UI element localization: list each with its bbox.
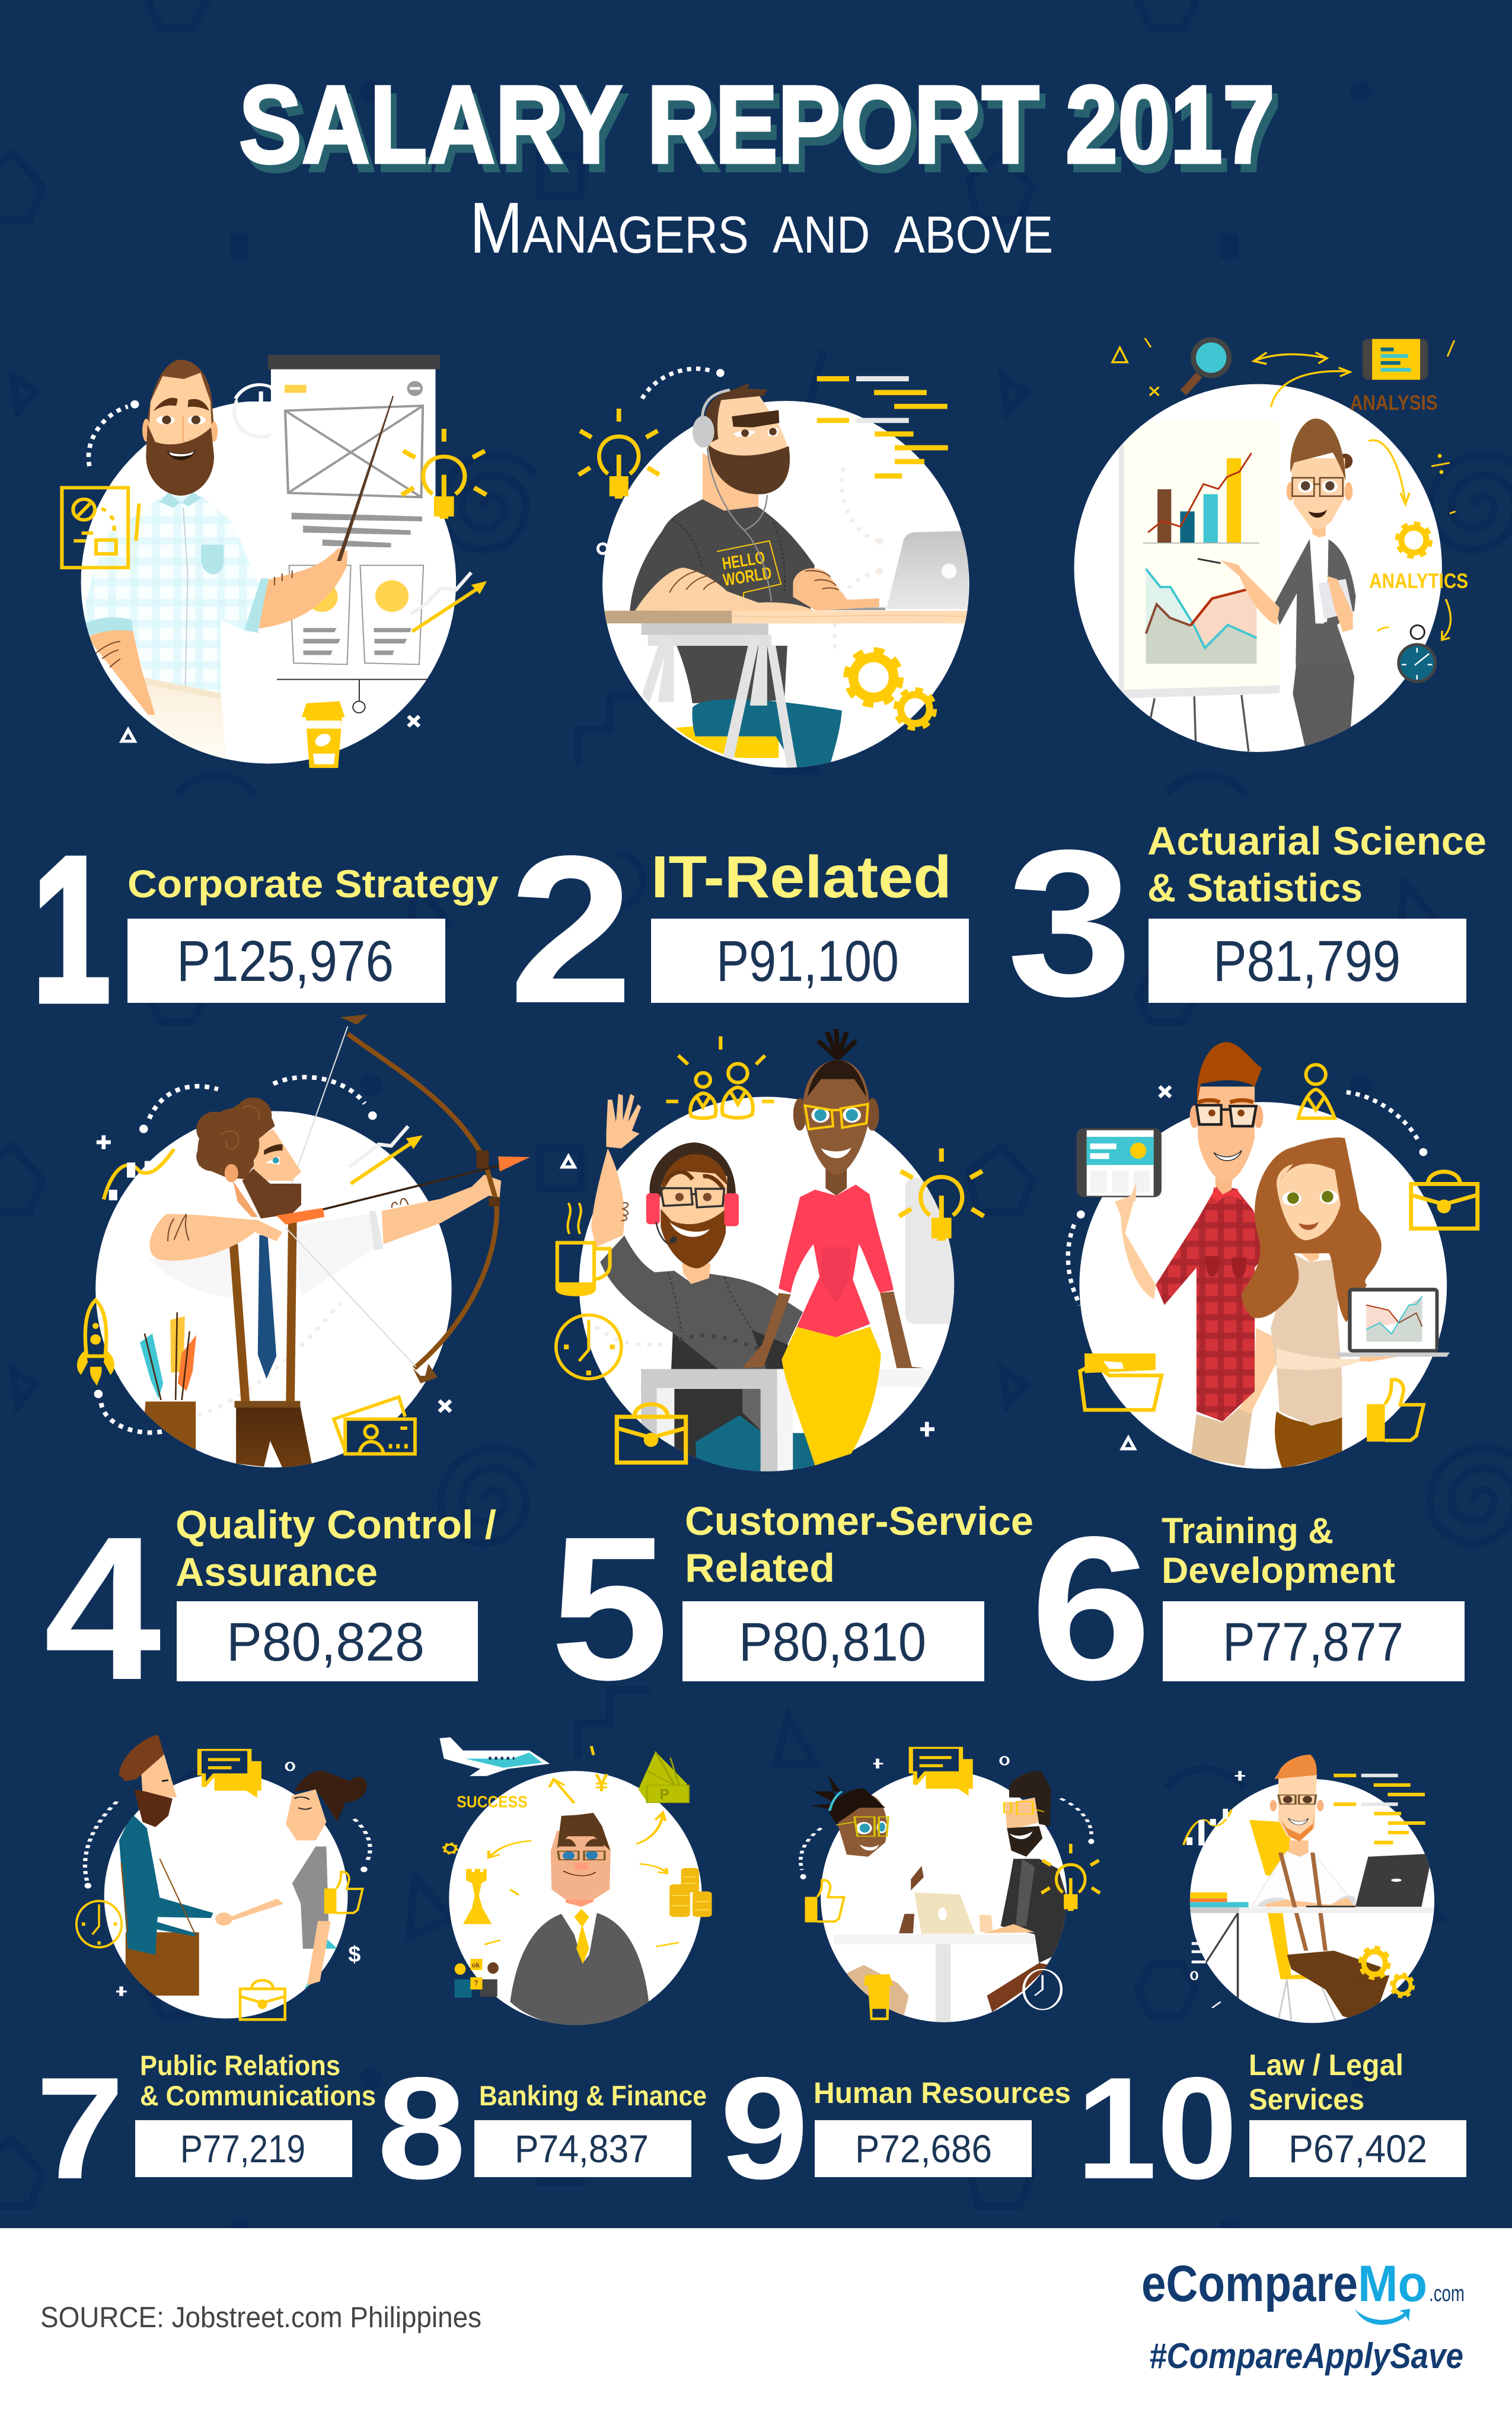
icon: code lines	[1334, 1774, 1425, 1844]
man in plaid	[1115, 1042, 1269, 1422]
title: SALARY REPORT 2017	[239, 63, 1275, 186]
illustration 5: customer service team	[556, 1029, 984, 1474]
tshirt logo: HELLO	[721, 548, 767, 573]
salary box: P74,837	[515, 2127, 649, 2171]
icon: dotted arc	[88, 400, 139, 466]
salary box: P72,686	[855, 2127, 992, 2171]
programmer head	[693, 383, 790, 601]
numeral 7: 7	[36, 2047, 125, 2209]
icon: bulb	[899, 1148, 984, 1241]
label: actuarial science and statistics	[1147, 819, 1487, 910]
logo: Mo	[1358, 2255, 1427, 2312]
icon: rocket	[77, 1300, 114, 1386]
man in grey shirt	[591, 1094, 803, 1369]
dollar sign: $	[348, 1942, 361, 1967]
label: quality control: Assurance	[176, 1550, 378, 1595]
salary box	[1163, 1601, 1465, 1681]
rank 3	[1007, 806, 1487, 1040]
sleeve shadow	[149, 1214, 375, 1297]
icon: briefcase	[1411, 1172, 1478, 1229]
salary box	[682, 1601, 984, 1681]
rank 5	[550, 1495, 1033, 1723]
icon: mug	[557, 1203, 610, 1295]
arrows	[484, 1746, 679, 1946]
logo: .com	[1429, 2281, 1465, 2306]
illustration 2: IT worker	[579, 369, 969, 769]
label: analysis: ANALYSIS	[1350, 391, 1438, 415]
icon: money fan: P	[660, 1787, 669, 1803]
handshake	[215, 1913, 232, 1926]
salary box: P67,402	[1288, 2127, 1427, 2171]
numeral 5: 5	[550, 1495, 669, 1723]
salary box: P77,877	[1223, 1612, 1403, 1672]
meeting scene	[834, 1859, 1069, 2024]
icon: ID card	[334, 1397, 415, 1454]
white circle	[821, 1771, 1067, 2022]
salary box: P81,799	[1213, 929, 1401, 993]
rank 1	[32, 814, 499, 1046]
title: SALARY REPORT 2017	[245, 72, 1281, 195]
icon: coffee cup	[302, 701, 344, 768]
icon: tablet	[1363, 339, 1428, 380]
icon: curve chart	[104, 1149, 174, 1200]
ghost clock	[234, 385, 288, 437]
icon: gears	[1360, 1948, 1414, 1997]
icon: code lines	[817, 376, 948, 479]
illustration 10: law and legal services	[1184, 1755, 1434, 2026]
illustration 9: human resources	[800, 1748, 1100, 2024]
label: public relations: Public Relations	[140, 2050, 340, 2081]
icon: coin stacks	[669, 1868, 712, 1917]
presenter head	[142, 360, 218, 496]
arrow	[276, 1156, 530, 1225]
illustration 1: corporate strategy presenter	[62, 355, 487, 768]
faint dots	[835, 467, 883, 652]
woman lower	[1275, 1411, 1342, 1469]
icon: marks	[122, 716, 419, 741]
salary box: P77,219	[180, 2127, 305, 2171]
label: public relations: & Communications	[140, 2080, 376, 2111]
icon: stopwatch	[1399, 625, 1436, 681]
salary box	[651, 919, 969, 1003]
numeral 4: 4	[44, 1495, 162, 1723]
salary box	[1149, 919, 1466, 1003]
illustration 8: banking and finance	[439, 1737, 712, 2026]
icon: rising arrow	[411, 572, 487, 632]
dots of divide sign	[1438, 454, 1443, 474]
desk	[605, 611, 968, 646]
numeral 9: 9	[720, 2047, 809, 2209]
label: success: SUCCESS	[457, 1792, 528, 1811]
woman in red top	[742, 1029, 924, 1465]
salary box	[474, 2120, 691, 2177]
label: customer service	[685, 1499, 1033, 1591]
white circle	[104, 1773, 347, 2019]
laptop	[815, 531, 968, 610]
lawyer head	[1270, 1755, 1323, 1857]
icon: light bulb	[401, 429, 486, 519]
icon: person	[1299, 1065, 1335, 1118]
tshirt logo: WORLD	[722, 564, 773, 590]
numeral 3: 3	[1007, 806, 1133, 1040]
label: actuarial science and statistics: & Statistics	[1147, 866, 1363, 910]
white circle	[81, 400, 456, 764]
footer	[0, 2228, 1512, 2409]
label: training and development: Development	[1162, 1550, 1395, 1591]
marks	[562, 1156, 934, 1436]
icon: magnifier	[1184, 340, 1229, 393]
icons: marks	[1112, 338, 1456, 631]
icon: money fan	[639, 1751, 689, 1803]
rank 4	[44, 1495, 496, 1723]
flip chart	[1119, 422, 1356, 751]
desk legs	[642, 637, 798, 769]
faint path	[197, 1303, 340, 1415]
dotted arcs	[1068, 1092, 1427, 1305]
salary box: P91,100	[716, 929, 899, 993]
logo: eCompare	[1141, 2255, 1358, 2312]
icon: meeting people	[455, 1959, 499, 1997]
illustration 3: actuarial analyst	[1074, 338, 1468, 752]
numeral 1: 1	[32, 814, 111, 1046]
programmer scene	[605, 499, 968, 769]
handshake people	[119, 1814, 336, 1996]
icon: gears	[847, 651, 934, 728]
salary box: P125,976	[177, 929, 394, 993]
rank 10	[1076, 2047, 1466, 2209]
icon: yellow card	[62, 487, 139, 568]
archer head	[196, 1098, 301, 1219]
presenter	[79, 492, 347, 764]
hashtag: #CompareApplySave	[1149, 2336, 1463, 2376]
icon: chess rook	[463, 1869, 492, 1924]
icon: light bulb	[579, 409, 659, 499]
illustration 4: quality control archer	[77, 1014, 530, 1468]
woman	[1242, 1137, 1396, 1426]
arrows in quiver	[140, 1312, 196, 1400]
label: actuarial science and statistics: Actuarial Science	[1147, 819, 1487, 863]
label: analytics: ANALYTICS	[1369, 570, 1468, 593]
white circle	[1074, 384, 1442, 752]
label: customer service: Customer-Service	[685, 1499, 1033, 1544]
label: human resources: Human Resources	[814, 2076, 1071, 2110]
white circle	[95, 1111, 452, 1467]
icons	[805, 1748, 1100, 2020]
pointer stick	[337, 396, 394, 561]
woman	[230, 1770, 367, 1986]
icon: meeting people: ?	[474, 1979, 479, 1987]
label: quality control: Quality Control /	[176, 1502, 496, 1547]
icon: team	[666, 1036, 774, 1118]
illustration 6: training and development	[1068, 1042, 1478, 1469]
numeral 2: 2	[509, 812, 633, 1047]
salary box	[127, 919, 445, 1003]
dotted arcs	[85, 1802, 370, 1888]
presentation board	[268, 355, 440, 713]
numeral 8: 8	[377, 2047, 466, 2209]
icon: thumb up	[1367, 1379, 1424, 1442]
icon: dotted arc	[598, 369, 725, 553]
rank 9	[720, 2047, 1071, 2209]
label: law and legal services: Law / Legal	[1249, 2048, 1403, 2082]
head: woman left	[811, 1774, 888, 1857]
icons	[76, 1750, 362, 2019]
salary box: P80,810	[739, 1612, 926, 1672]
icon: plane	[439, 1737, 550, 1776]
label: quality control	[176, 1502, 496, 1595]
bearded man head	[119, 1735, 177, 1827]
icon: meeting people: ok	[471, 1961, 480, 1969]
white circle	[602, 401, 969, 767]
numeral 6: 6	[1031, 1495, 1151, 1723]
head: man right	[1004, 1771, 1051, 1857]
archer body	[145, 1401, 312, 1468]
tablet	[1076, 1128, 1162, 1202]
salary box: P80,828	[227, 1612, 425, 1672]
label: customer service: Related	[685, 1546, 835, 1591]
label: training and development	[1162, 1511, 1395, 1591]
icon: small gear	[444, 1843, 457, 1854]
salary box	[177, 1601, 478, 1681]
analyst head	[1287, 419, 1352, 537]
white circle	[1079, 1102, 1447, 1469]
icon: curve chart	[1184, 1809, 1232, 1846]
white circle	[449, 1771, 702, 2025]
faint path	[596, 1327, 670, 1344]
marks	[1191, 1771, 1245, 2008]
arrows	[1253, 352, 1450, 640]
lawyer scene	[1190, 1820, 1434, 2026]
label: public relations	[140, 2050, 376, 2111]
icon: gear	[1398, 524, 1430, 556]
yen sign: ¥	[595, 1770, 608, 1797]
analyst	[1198, 538, 1356, 748]
numeral 10: 10	[1076, 2047, 1237, 2209]
white circle	[579, 1097, 954, 1471]
label: IT-related: IT-Related	[651, 844, 952, 910]
dotted arcs	[800, 1799, 1094, 1879]
logo	[1141, 2255, 1465, 2325]
dotted arcs	[94, 1077, 377, 1433]
archer right arm	[369, 1175, 501, 1250]
label: corporate strategy: Corporate Strategy	[127, 862, 499, 906]
source: SOURCE: Jobstreet.com Philippines	[40, 2302, 481, 2334]
archer drawing arm	[149, 1214, 283, 1261]
white circle	[1190, 1779, 1434, 2023]
bow	[281, 1014, 500, 1384]
label: banking and finance: Banking & Finance	[479, 2080, 707, 2111]
man lower	[1191, 1394, 1255, 1466]
icon: growth arrow	[349, 1126, 423, 1184]
label: law and legal services: Services	[1249, 2083, 1364, 2116]
marks	[1122, 1086, 1170, 1449]
icon: folder	[1080, 1355, 1162, 1410]
subtitle: MANAGERS AND ABOVE	[470, 187, 1053, 268]
label: law and legal services	[1249, 2048, 1403, 2116]
label: training and development: Training &	[1162, 1511, 1334, 1551]
icon: briefcase	[617, 1404, 686, 1462]
team clipped	[1191, 1328, 1342, 1469]
tshirt logo	[717, 541, 781, 603]
marks	[97, 1135, 451, 1411]
rank 7	[36, 2047, 376, 2209]
office scene	[641, 1178, 959, 1474]
illustration 7: public relations handshake	[76, 1735, 370, 2019]
banker	[510, 1813, 649, 2026]
icon: clock	[556, 1315, 621, 1379]
laptop	[1336, 1288, 1450, 1362]
rank 6	[1031, 1495, 1465, 1723]
rank 8	[377, 2047, 707, 2209]
salary box	[1249, 2120, 1466, 2177]
bar chart	[1143, 453, 1259, 543]
salary box	[135, 2120, 352, 2177]
salary box	[815, 2120, 1032, 2177]
area chart	[1146, 569, 1256, 664]
rank 2	[509, 812, 969, 1047]
